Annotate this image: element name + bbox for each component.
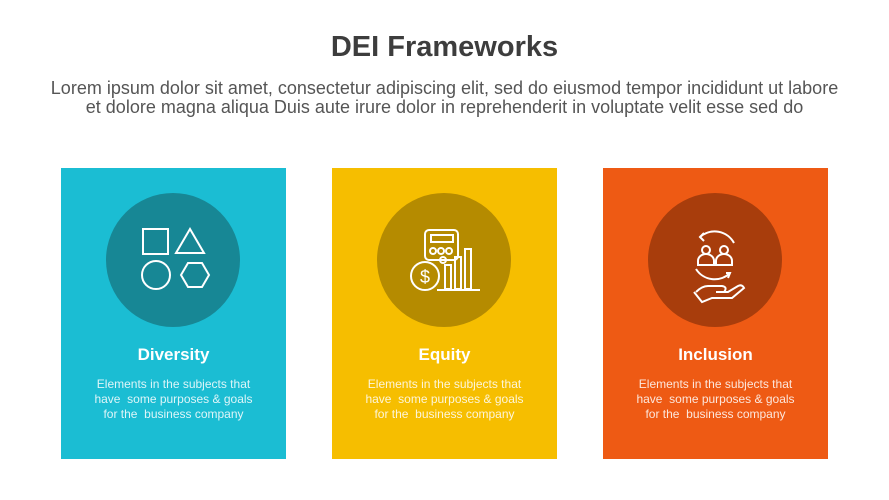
heading: Diversity xyxy=(138,345,209,364)
text: for the business company xyxy=(103,407,244,421)
title: DEI Frameworks xyxy=(331,31,558,63)
text: have some purposes & goals xyxy=(365,392,524,406)
icon: calculator: $ xyxy=(420,267,430,287)
heading: Inclusion xyxy=(678,345,753,364)
text xyxy=(365,377,524,421)
text xyxy=(636,377,795,421)
text: have some purposes & goals xyxy=(94,392,253,406)
text: Elements in the subjects that xyxy=(368,377,521,391)
icon: shapes xyxy=(106,193,240,327)
subtitle xyxy=(51,78,838,117)
text: Elements in the subjects that xyxy=(639,377,792,391)
text: for the business company xyxy=(645,407,786,421)
subtitle: et dolore magna aliqua Duis aute irure dolor in reprehenderit in voluptate velit esse sed do xyxy=(86,97,803,117)
text xyxy=(94,377,253,421)
icon: calculator xyxy=(377,193,511,327)
panel: equity xyxy=(332,168,557,459)
heading: Equity xyxy=(419,345,470,364)
panel: diversity xyxy=(61,168,286,459)
text: for the business company xyxy=(374,407,515,421)
text: have some purposes & goals xyxy=(636,392,795,406)
text: Elements in the subjects that xyxy=(97,377,250,391)
icon: people hand xyxy=(648,193,782,327)
subtitle: Lorem ipsum dolor sit amet, consectetur adipiscing elit, sed do eiusmod tempor incididunt ut labore xyxy=(51,78,838,98)
panel: inclusion xyxy=(603,168,828,459)
